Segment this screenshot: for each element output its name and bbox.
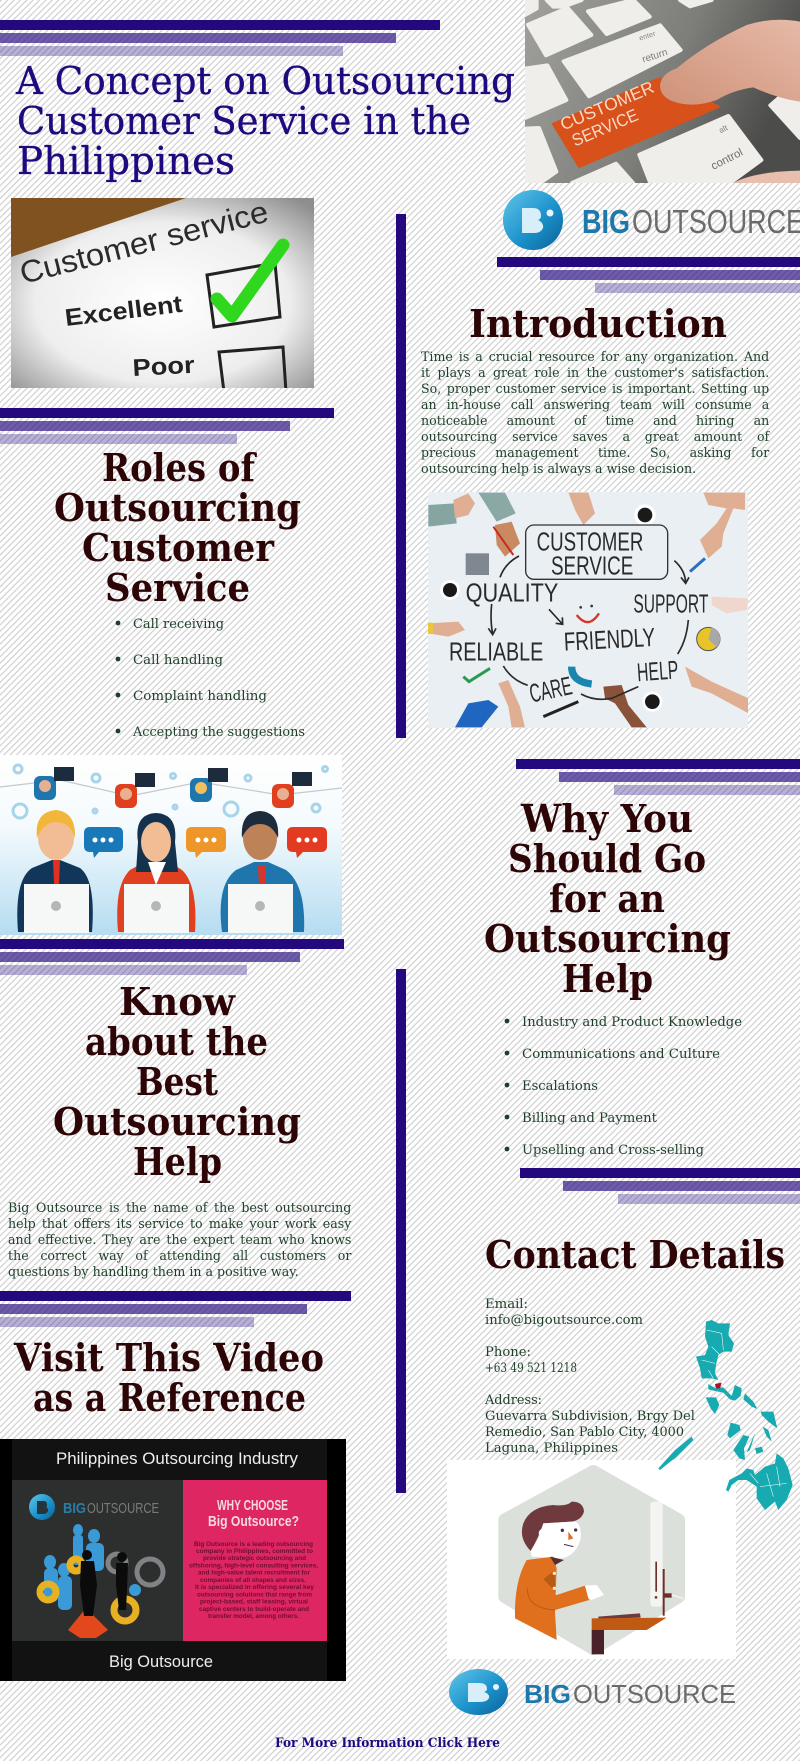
photo: customer service key on keyboard: alt (717, 123, 730, 135)
text block: about Big Outsource (8, 1200, 352, 1280)
heading: Know about the Best Outsourcing Help: Best (136, 1059, 218, 1104)
text block: introduction: outsourcing help is always a wise decision. (421, 462, 696, 476)
diagram photo: customer service qualities (428, 492, 748, 728)
video thumbnail (0, 1439, 346, 1681)
heading: Roles of Outsourcing Customer Service (54, 445, 301, 610)
video thumbnail: captive centers to build-operate and (199, 1606, 309, 1613)
photo: customer service key on keyboard: SERVICE (569, 105, 641, 150)
contact text: Address: (484, 1393, 542, 1408)
contact text: Guevarra Subdivision, Brgy Del (485, 1409, 695, 1424)
footer link: For More Information Click Here (275, 1736, 500, 1751)
logo: Big Outsource bottom: BIG (524, 1679, 571, 1709)
contact text: Phone: (485, 1345, 531, 1360)
video thumbnail: and high-value talent recruitment for (198, 1570, 311, 1576)
contact text: Laguna, Philippines (485, 1441, 618, 1456)
photo: customer service key on keyboard: enter (638, 29, 657, 43)
logo: Big Outsource top (503, 190, 800, 250)
video thumbnail: company in Philippines, committed to (196, 1548, 313, 1555)
logo: Big Outsource bottom: OUTSOURCE (573, 1679, 736, 1709)
photo: customer service checklist (11, 194, 314, 392)
stripe bars above roles (0, 408, 334, 444)
diagram photo: customer service qualities: SERVICE (551, 550, 633, 580)
text block: introduction: it plays a great role in the customer's satisfaction. (421, 366, 769, 380)
photo: customer service key on keyboard: return (641, 47, 669, 66)
video thumbnail: Philippines Outsourcing Industry (56, 1449, 298, 1468)
diagram photo: customer service qualities: CARE (527, 670, 575, 709)
diagram photo: customer service qualities: QUALITY (466, 578, 558, 608)
stripe bars above contact (520, 1168, 800, 1204)
list: reasons: Billing and Payment (522, 1111, 658, 1126)
video thumbnail: offshoring, high-level consulting services, (189, 1562, 318, 1570)
photo: customer service checklist: Excellent (63, 291, 184, 332)
video thumbnail: provide strategic outsourcing and (203, 1555, 306, 1562)
heading: Why You Should Go for an Outsourcing Help: Why You (520, 796, 693, 841)
heading: Know about the Best Outsourcing Help: about the (85, 1019, 268, 1064)
text block: about Big Outsource: Big Outsource is the name of the best outsourcing (8, 1200, 351, 1216)
heading: Roles of Outsourcing Customer Service: Outsourcing (54, 485, 301, 530)
heading: Why You Should Go for an Outsourcing Help: Should Go (508, 836, 706, 881)
heading: Visit This Video as a Reference: Visit This Video (13, 1335, 324, 1380)
heading: Roles of Outsourcing Customer Service: Service (105, 565, 250, 610)
video thumbnail: OUTSOURCE (87, 1500, 159, 1517)
heading: Why You Should Go for an Outsourcing Help (484, 796, 731, 1001)
list: reasons (505, 1015, 742, 1158)
heading: Know about the Best Outsourcing Help: Know (119, 979, 236, 1024)
video thumbnail: BIG (63, 1500, 86, 1517)
stripe bars above introduction (497, 257, 800, 293)
text block: about Big Outsource: questions by handling them in a positive way. (8, 1264, 299, 1280)
text block: introduction: outsourcing service saves a great amount of (421, 430, 769, 444)
video thumbnail: project-based, staff leasing, virtual (200, 1598, 308, 1606)
diagram photo: customer service qualities: RELIABLE (449, 637, 543, 667)
contact text: +63 49 521 1218 (485, 1361, 577, 1376)
map of the Philippines (658, 1320, 793, 1510)
heading: Why You Should Go for an Outsourcing Help: Outsourcing (484, 916, 731, 961)
list: reasons: Industry and Product Knowledge (522, 1015, 742, 1030)
list: roles: Call handling (133, 653, 223, 668)
heading: Know about the Best Outsourcing Help: Help (133, 1139, 222, 1184)
video thumbnail: It is specialized in offering several key (195, 1584, 315, 1591)
video thumbnail: Big Outsource (109, 1652, 213, 1671)
list: roles: Complaint handling (133, 689, 267, 704)
title: A Concept on Outsourcing (15, 59, 515, 103)
title: Philippines (17, 139, 235, 183)
illustration: call centre agents (0, 755, 342, 935)
top-left stripe bars (0, 20, 440, 56)
diagram photo: customer service qualities: CUSTOMER (537, 527, 643, 557)
logo: Big Outsource bottom (449, 1669, 736, 1715)
list: roles (116, 617, 305, 740)
video thumbnail: outsourcing solutions that range from (197, 1592, 312, 1598)
heading: Why You Should Go for an Outsourcing Help: for an (549, 876, 665, 921)
photo: customer service checklist: Poor (132, 352, 195, 382)
list: roles: Call receiving (133, 617, 224, 632)
divider column 1 (396, 214, 406, 738)
heading: Roles of Outsourcing Customer Service: Customer (82, 525, 275, 570)
contact text: Remedio, San Pablo City, 4000 (485, 1425, 684, 1440)
diagram photo: customer service qualities: HELP (636, 655, 679, 687)
list: reasons: Escalations (522, 1079, 598, 1094)
contact text (484, 1297, 695, 1456)
diagram photo: customer service qualities: SUPPORT (633, 589, 708, 619)
list: reasons: Communications and Culture (522, 1047, 720, 1062)
contact text: info@bigoutsource.com (485, 1313, 643, 1328)
text block: introduction (421, 350, 770, 476)
stripe bars above video heading (0, 1291, 351, 1327)
heading: Visit This Video as a Reference: as a Reference (33, 1375, 306, 1420)
heading: Roles of Outsourcing Customer Service: Roles of (102, 445, 257, 490)
list: roles: Accepting the suggestions (132, 725, 305, 740)
title (15, 59, 515, 183)
logo: Big Outsource top: BIG (582, 203, 630, 240)
heading: Why You Should Go for an Outsourcing Help: Help (562, 956, 653, 1001)
photo: customer service key on keyboard: CUSTOMER (557, 77, 657, 134)
divider column 2 (396, 969, 406, 1493)
list: reasons: Upselling and Cross-selling (522, 1143, 704, 1158)
photo: customer service checklist: Customer service (16, 194, 272, 291)
text block: introduction: Time is a crucial resource for any organization. And (421, 350, 769, 364)
text block: about Big Outsource: help that offers its service to make your work easy (8, 1216, 351, 1232)
text block: about Big Outsource: the correct way of attending all customers or (8, 1248, 351, 1264)
stripe bars above why (516, 759, 800, 795)
illustration: man at computer (447, 1460, 736, 1659)
heading: Know about the Best Outsourcing Help: Outsourcing (53, 1099, 301, 1144)
text block: introduction: noticeable amount of time and hiring an (421, 414, 769, 428)
diagram photo: customer service qualities: FRIENDLY (563, 622, 656, 657)
video thumbnail: WHY CHOOSE (217, 1497, 288, 1514)
text block: introduction: an in-house call answering team will consume a (421, 398, 769, 412)
text block: about Big Outsource: and effective. They are the expert team who knows (8, 1232, 351, 1248)
video thumbnail: Big Outsource is a leading outsourcing (194, 1541, 313, 1548)
title: Customer Service in the (17, 99, 471, 143)
heading: Introduction: Introduction (469, 301, 727, 346)
photo: customer service key on keyboard: control (709, 147, 745, 173)
heading: Know about the Best Outsourcing Help (53, 979, 301, 1184)
photo: customer service key on keyboard (525, 0, 800, 183)
contact text: Email: (485, 1297, 528, 1312)
video thumbnail: companies of all shapes and sizes. (200, 1577, 306, 1584)
video thumbnail: Big Outsource? (208, 1513, 299, 1530)
stripe bars under agents (0, 939, 344, 975)
text block: introduction: So, proper customer service is important. Setting up (421, 382, 769, 396)
video thumbnail: transfer model, among others. (208, 1613, 299, 1620)
heading: Visit This Video as a Reference (13, 1335, 324, 1420)
text block: introduction: precious management time. So, asking for (421, 446, 769, 460)
